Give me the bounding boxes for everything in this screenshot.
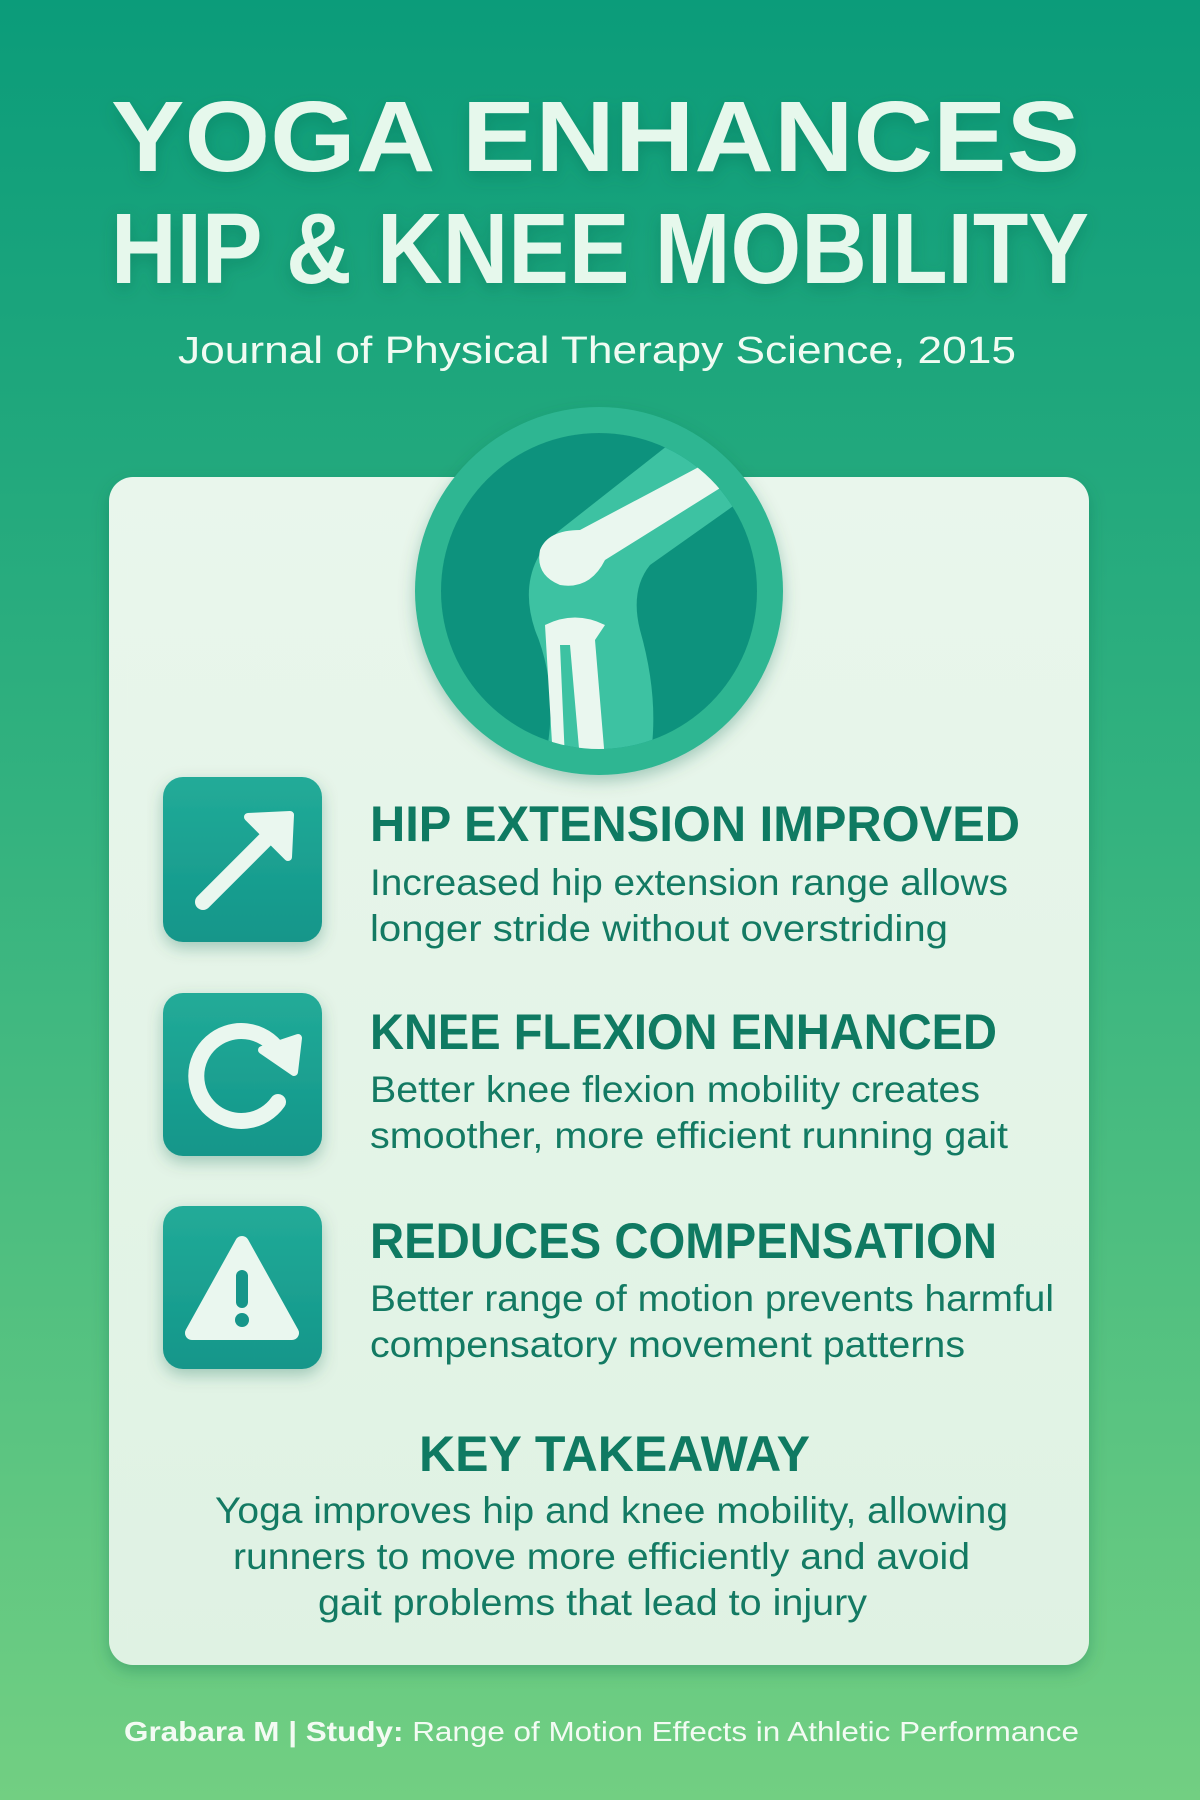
key takeaway (215, 1426, 1008, 1623)
item: knee flexion (163, 993, 1009, 1156)
key takeaway: gait problems that lead to injury (318, 1582, 868, 1623)
text: Better knee flexion mobility creates (370, 1069, 980, 1110)
title: YOGA ENHANCES (111, 81, 1080, 193)
key takeaway: runners to move more efficiently and avoid (233, 1536, 970, 1577)
item: compensation (163, 1206, 1054, 1369)
key takeaway: KEY TAKEAWAY (419, 1426, 810, 1482)
text (370, 1069, 1009, 1156)
footer: Grabara M | Study: Range of Motion Effects in Athletic Performance (124, 1716, 1079, 1747)
icon: warning (163, 1206, 322, 1369)
text: longer stride without overstriding (370, 908, 948, 949)
subtitle: Journal of Physical Therapy Science, 2015 (178, 330, 1016, 372)
text: Increased hip extension range allows (370, 862, 1008, 903)
text (370, 1278, 1054, 1365)
heading: KNEE FLEXION ENHANCED (370, 1004, 997, 1060)
heading: REDUCES COMPENSATION (370, 1213, 997, 1269)
heading: HIP EXTENSION IMPROVED (370, 796, 1020, 852)
key takeaway: Yoga improves hip and knee mobility, allowing (215, 1490, 1008, 1531)
item: hip extension (163, 777, 1020, 949)
icon: knee joint (415, 407, 783, 775)
panel: main card (109, 407, 1089, 1665)
text: Better range of motion prevents harmful (370, 1278, 1054, 1319)
title: HIP & KNEE MOBILITY (111, 193, 1089, 305)
icon: rotate (163, 993, 322, 1156)
text: smoother, more efficient running gait (370, 1115, 1009, 1156)
title (111, 81, 1089, 305)
text (370, 862, 1008, 949)
icon: arrow (163, 777, 322, 942)
text: compensatory movement patterns (370, 1324, 965, 1365)
